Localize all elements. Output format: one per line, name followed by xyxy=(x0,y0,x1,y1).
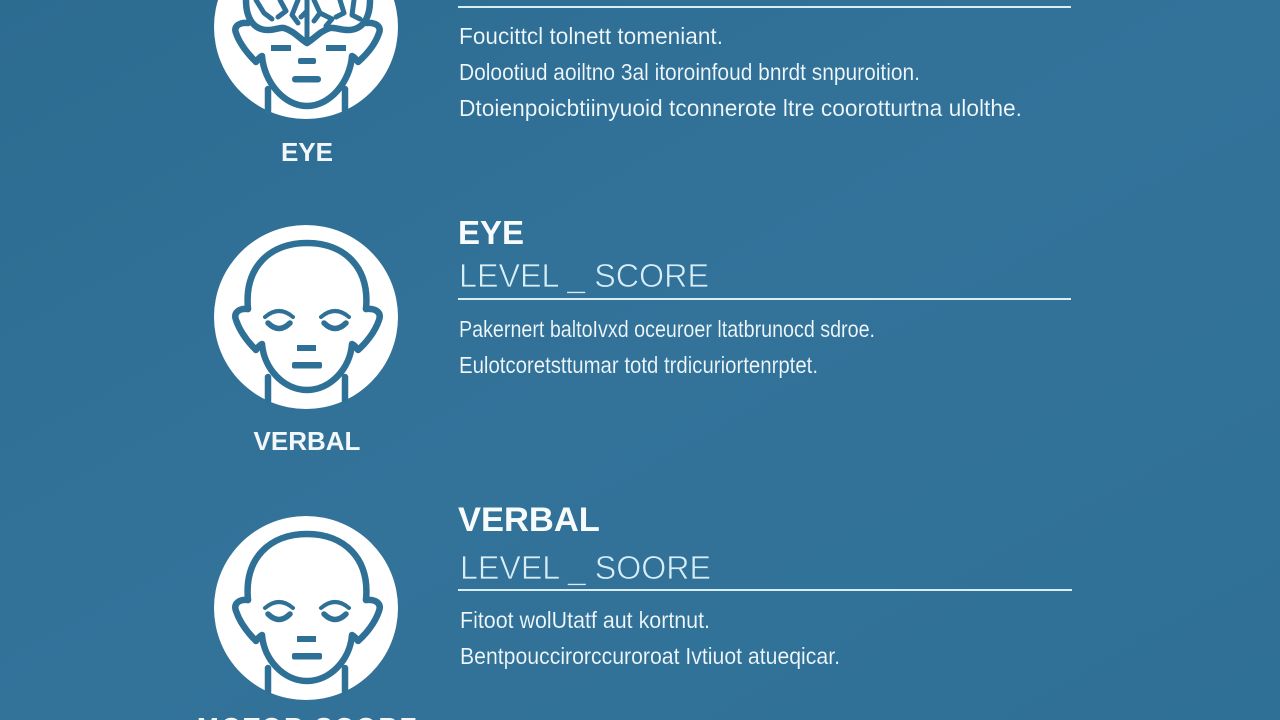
description text: Eulotcoretsttumar totd trdicuriortenrptet. xyxy=(459,352,818,378)
panel: VERBAL row xyxy=(197,501,1072,720)
description text: Foucittcl tolnett tomeniant. xyxy=(459,23,723,49)
description text: Dtoienpoicbtiinyuoid tconnerote ltre coorotturtna ulolthe. xyxy=(459,95,1022,121)
panel: first row (clipped at top) xyxy=(214,0,1071,167)
description text xyxy=(459,23,1022,121)
icon: head with closed eyes xyxy=(214,516,398,700)
divider rule xyxy=(458,298,1071,300)
label: EYE under icon: EYE xyxy=(281,137,333,167)
description text: Fitoot wolUtatf aut kortnut. xyxy=(460,607,710,633)
description text xyxy=(460,607,840,669)
description text: Pakernert baltoIvxd oceuroer ltatbrunocd sdroe. xyxy=(459,316,875,342)
description text: Bentpouccirorccuroroat Ivtiuot atueqicar. xyxy=(460,643,840,669)
icon: head with closed eyes xyxy=(214,225,398,409)
divider rule xyxy=(458,589,1072,591)
subheading: level score: LEVEL _ SOORE xyxy=(460,549,711,586)
panel: EYE row xyxy=(214,214,1071,456)
subheading: level score: LEVEL _ SCORE xyxy=(459,257,709,294)
icon: head with exposed brain xyxy=(214,0,398,119)
label: VERBAL under icon: VERBAL xyxy=(254,426,361,456)
description text xyxy=(459,316,875,378)
heading: VERBAL: VERBAL xyxy=(458,501,600,539)
divider rule xyxy=(458,6,1071,8)
description text: Dolootiud aoiltno 3al itoroinfoud bnrdt snpuroition. xyxy=(459,59,920,85)
heading: EYE: EYE xyxy=(458,214,524,251)
